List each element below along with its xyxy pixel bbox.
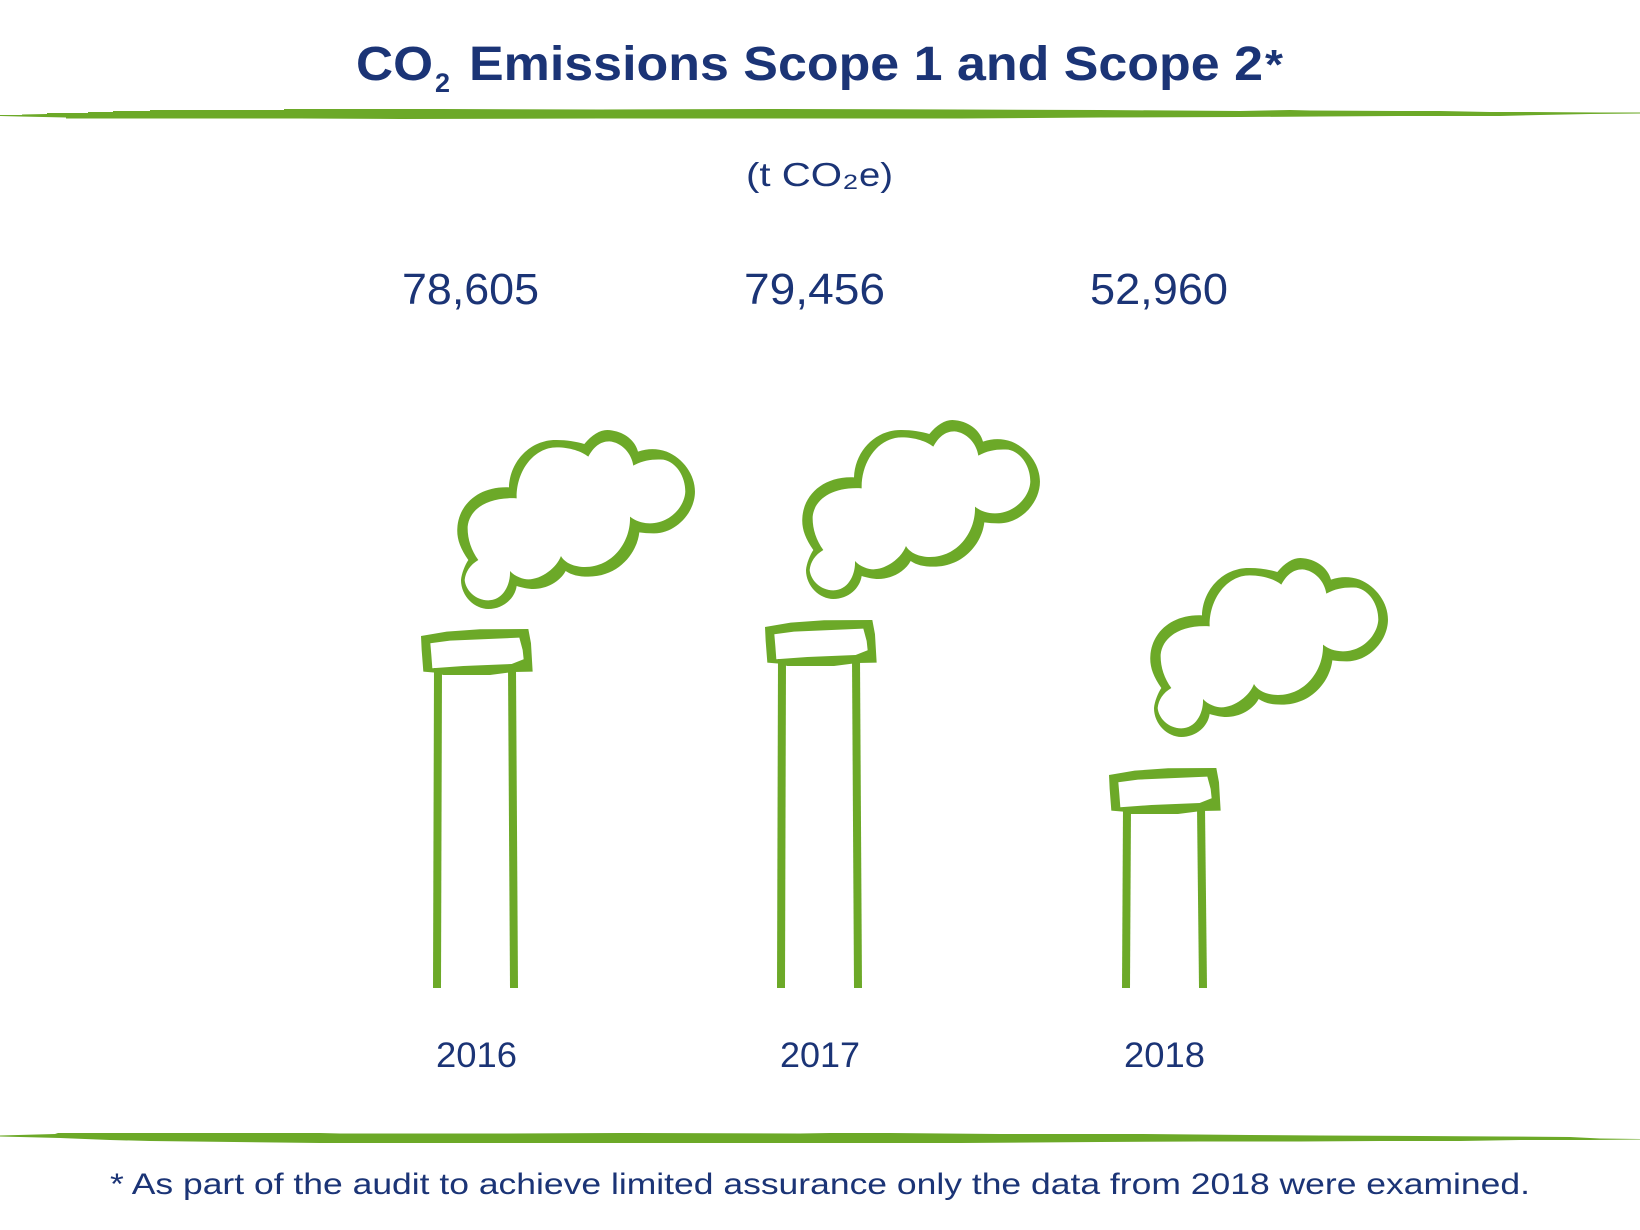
value 2018: 52,960 [1090,265,1228,314]
smoke cloud 2016 [457,430,695,609]
chimney left wall 2016 [433,668,442,988]
chimney right wall 2016 [508,668,518,988]
chimney left wall 2017 [777,659,786,988]
title: Emissions Scope 1 and Scope 2 [469,38,1263,91]
top divider line [0,109,1640,119]
footnote: * As part of the audit to achieve limited assurance only the data from 2018 were examined. [110,1168,1530,1201]
title: 2 [435,68,450,98]
chimney right wall 2018 [1197,807,1207,988]
chimney cap 2017 [765,620,877,666]
chimney cap 2016 [421,629,533,675]
chimney 2018 [1109,558,1388,988]
unit label: 2 [843,171,858,194]
unit label: (t CO [746,156,842,193]
year 2017: 2017 [780,1036,860,1075]
title: * [1265,41,1284,88]
chimney 2017 [765,420,1040,988]
chimney right wall 2017 [852,659,862,988]
unit label: e) [859,156,893,193]
value 2016: 78,605 [402,265,539,314]
chimney 2016 [421,430,695,988]
value 2017: 79,456 [744,265,885,314]
unit label [746,156,893,194]
title [356,38,1284,98]
smoke cloud 2018 [1150,558,1388,737]
smoke cloud 2017 [802,420,1040,599]
chimney left wall 2018 [1122,807,1131,988]
chimney cap 2018 [1109,768,1221,814]
year 2016: 2016 [436,1036,517,1075]
bottom divider line [0,1133,1640,1143]
year 2018: 2018 [1124,1036,1205,1075]
title: CO [356,38,433,91]
